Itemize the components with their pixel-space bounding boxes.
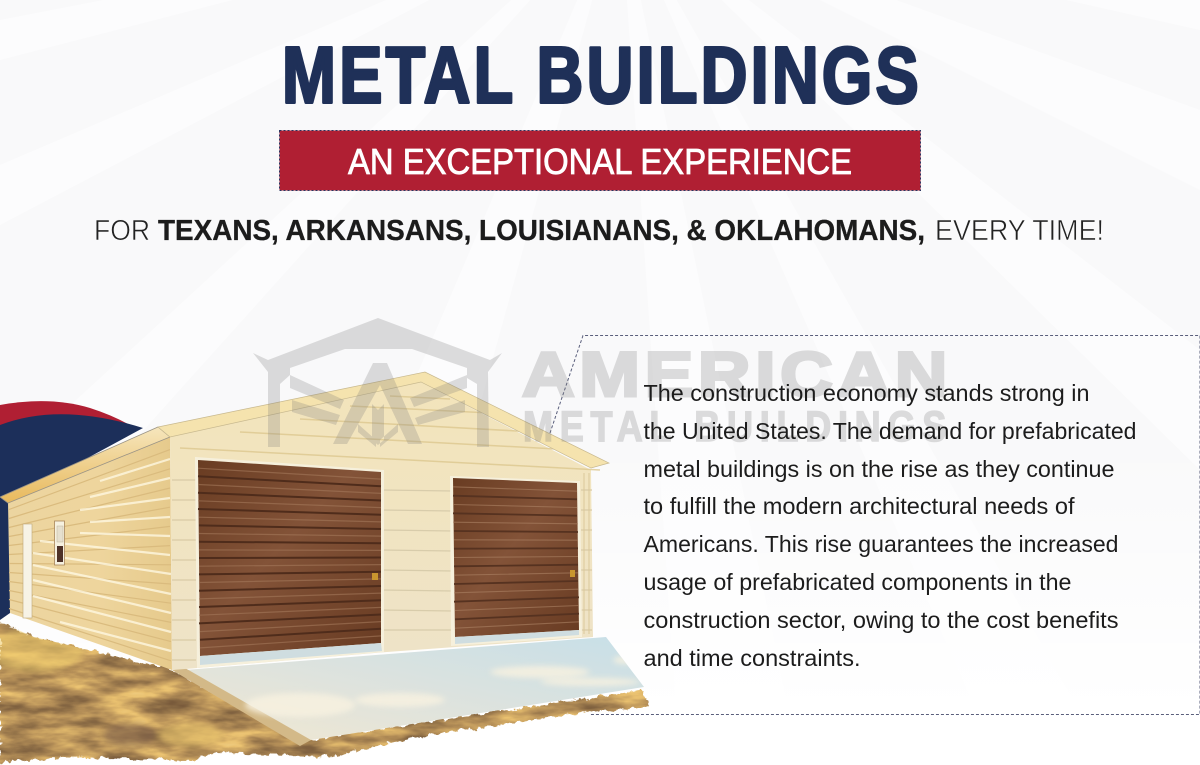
door frame left <box>195 457 384 668</box>
side window <box>54 521 64 565</box>
logo letter A <box>333 363 422 444</box>
logo wheat <box>358 404 398 447</box>
logo right wings <box>410 375 467 425</box>
body paragraph: and time constraints. <box>644 645 860 671</box>
body paragraph: usage of prefabricated components in the <box>644 569 1072 595</box>
front gable trim <box>158 372 609 468</box>
front wall <box>170 382 600 670</box>
door handle right <box>570 570 575 577</box>
company name watermark: AMERICAN <box>522 340 952 410</box>
door handle left <box>372 573 378 580</box>
company logo watermark <box>253 318 502 447</box>
body paragraph: metal buildings is on the rise as they continue <box>644 456 1114 482</box>
tagline: FOR <box>94 215 150 247</box>
body paragraph: the United States. The demand for prefabricated <box>644 418 1136 444</box>
door bottom strip right <box>455 630 579 644</box>
dashed text frame <box>550 336 1200 714</box>
company name watermark: METAL BUILDINGS <box>523 403 953 451</box>
body paragraph: to fulfill the modern architectural needs of <box>644 493 1075 519</box>
body paragraph: The construction economy stands strong in <box>644 380 1090 406</box>
concrete slab <box>172 637 644 746</box>
body paragraph <box>644 380 1136 671</box>
metal building with ground <box>0 372 648 763</box>
title: METAL BUILDINGS <box>282 30 922 120</box>
body paragraph: Americans. This rise guarantees the increased <box>644 531 1118 557</box>
subtitle text: AN EXCEPTIONAL EXPERIENCE <box>348 141 852 182</box>
side wall <box>8 437 172 670</box>
side door <box>23 524 32 618</box>
side roof edge <box>0 427 170 503</box>
door frame right <box>450 476 582 646</box>
red and navy arcs behind building <box>0 401 143 620</box>
body paragraph: construction sector, owing to the cost benefits <box>644 607 1118 633</box>
tagline: TEXANS, ARKANSANS, LOUISIANANS, & OKLAHOMANS, <box>158 215 925 247</box>
ground <box>0 622 648 763</box>
brown roll-up door left <box>198 460 382 665</box>
door bottom strip left <box>200 643 382 665</box>
company name watermark <box>522 340 953 451</box>
logo house frame <box>253 318 502 447</box>
brown roll-up door right <box>453 478 579 644</box>
tagline: EVERY TIME! <box>935 215 1104 247</box>
subtitle banner <box>280 130 920 190</box>
logo left wings <box>290 375 344 425</box>
